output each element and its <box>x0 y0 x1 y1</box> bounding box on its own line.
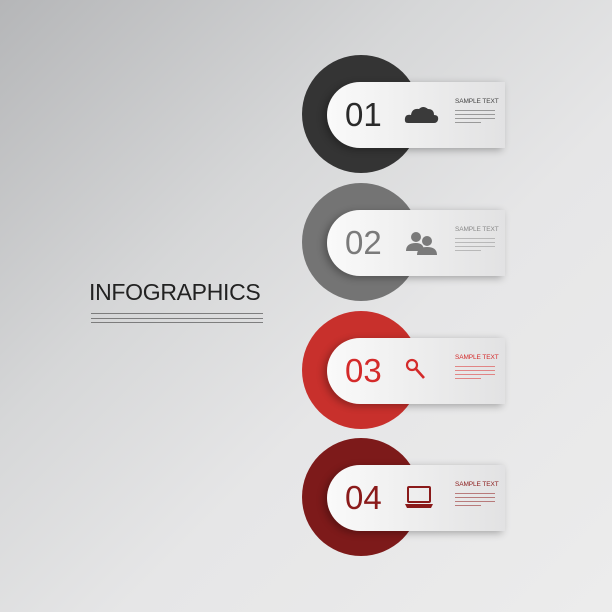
title: INFOGRAPHICS <box>89 279 260 305</box>
number 04: 04 <box>345 479 382 516</box>
step 01 <box>302 55 506 173</box>
icon: people <box>406 232 437 255</box>
text: sample: SAMPLE TEXT <box>455 226 499 233</box>
step 03 <box>302 311 506 429</box>
icon: laptop <box>405 486 433 508</box>
text: sample: SAMPLE TEXT <box>455 354 499 361</box>
text: sample: SAMPLE TEXT <box>455 481 499 488</box>
number 01: 01 <box>345 96 382 133</box>
step 04 <box>302 438 506 556</box>
step 02 <box>302 183 506 301</box>
icon: cloud <box>404 107 438 123</box>
number 03: 03 <box>345 352 382 389</box>
icon: magnifier <box>406 358 425 379</box>
body text <box>91 313 263 323</box>
text: sample: SAMPLE TEXT <box>455 98 499 105</box>
number 02: 02 <box>345 224 382 261</box>
